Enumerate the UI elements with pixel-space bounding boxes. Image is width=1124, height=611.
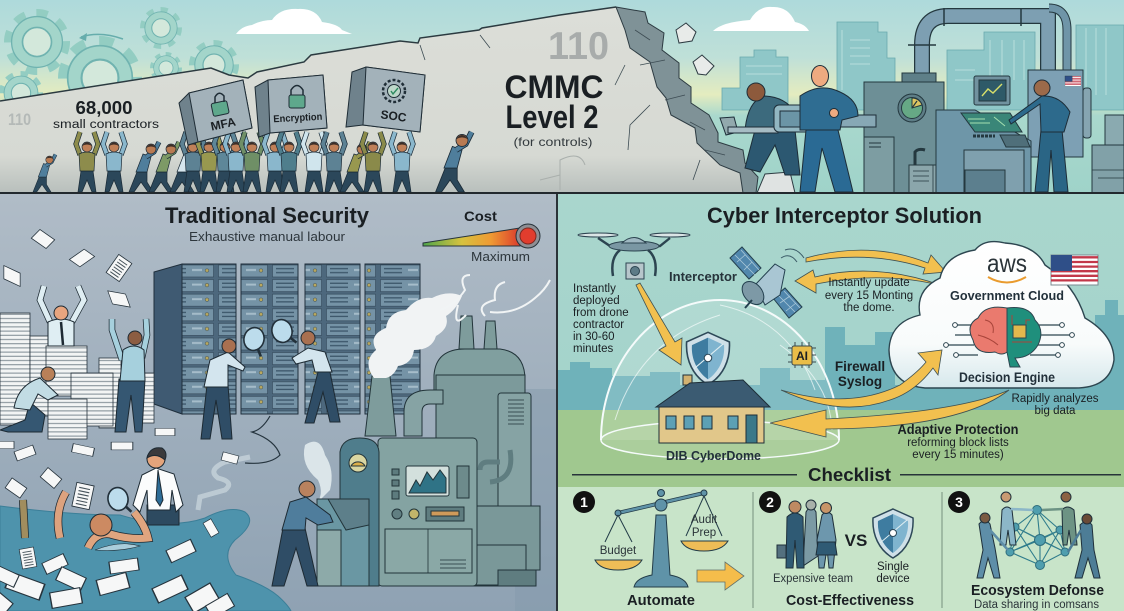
green ground [558, 410, 1124, 487]
label: 68,000 small contractors: 68,000 [76, 98, 132, 118]
icon: falling debris [676, 23, 795, 193]
label: faded 110 on wall left: 110 [8, 110, 31, 129]
heading: CMMC Level 2: Level 2 [506, 99, 598, 135]
item 3: Ecosystem Defense [948, 491, 1104, 611]
factory: tank with chimneys [365, 316, 540, 586]
block: MFA: MFA [209, 115, 237, 134]
gauge: cost meter at maximum [423, 208, 540, 264]
heading: Traditional Security: Exhaustive manual labour [189, 229, 346, 244]
person: kneeling sorting papers [0, 367, 58, 432]
item 2: Cost-Effectiveness: Expensive team [773, 573, 853, 585]
floating paper [0, 482, 235, 611]
dome shield bubble [601, 300, 839, 459]
person: back view arms raised [112, 319, 147, 432]
arrow: dome to decision engine [781, 350, 942, 407]
machine: right cabinet with flag [1028, 70, 1124, 193]
worker: left holding the ram [745, 83, 800, 175]
machine: console and screen [936, 76, 1031, 193]
label: Firewall Syslog [835, 359, 885, 389]
block: Encryption: Encryption [273, 112, 323, 125]
icon: people around network [977, 492, 1100, 578]
server racks [154, 264, 420, 414]
machine: control cabinet [317, 438, 477, 586]
arrow: satellite to cloud [806, 250, 946, 274]
item 2: Cost-Effectiveness: VS [845, 531, 867, 550]
label: Decision Engine: Decision Engine [959, 370, 1055, 385]
vertical divider [556, 194, 558, 611]
panel: Traditional Security [0, 194, 556, 611]
block: SOC [346, 67, 425, 132]
icon: ram drill [720, 105, 876, 135]
item 1: Automate: Prep [692, 527, 716, 539]
city skyline [722, 22, 1124, 110]
text: instantly update note: the dome. [843, 302, 895, 314]
water pool [0, 506, 291, 611]
text: rapidly analyzes [1012, 393, 1099, 417]
icon: magnifier in water [106, 486, 131, 516]
icon: AI chip: AI [796, 349, 808, 363]
arrow: decision engine to house [770, 390, 1009, 437]
flag [1051, 255, 1098, 285]
panel: top banner wall scene [0, 0, 1124, 193]
worker: operator at console [1009, 80, 1070, 192]
item 3: Ecosystem Defense: Data sharing in comsans [974, 599, 1099, 611]
text: instantly update note [825, 277, 913, 314]
scattered paper [0, 230, 239, 498]
text: drone deployment note: contractor [573, 319, 624, 331]
gauge: cost meter at maximum: Cost [464, 208, 497, 224]
text: drone deployment note: Instantly [573, 283, 616, 295]
panel: checklist items [558, 487, 1124, 611]
text: adaptive protection: reforming block lists [907, 437, 1009, 449]
heading: Traditional Security: Traditional Security [165, 203, 370, 228]
text: drone deployment note [573, 283, 629, 355]
text: instantly update note: every 15 Monting [825, 290, 913, 302]
text: adaptive protection: every 15 minutes) [912, 449, 1004, 461]
item 1: Automate: Budget [600, 545, 637, 557]
person: arms raised behind stacks [40, 286, 84, 346]
icon: cloud left [236, 9, 352, 34]
smoke plumes [304, 275, 550, 505]
block: Encryption [255, 75, 327, 137]
people pushing and lifting the blocks [33, 132, 472, 192]
block: SOC: SOC [380, 107, 408, 125]
government cloud [889, 242, 1114, 388]
text: rapidly analyzes: Rapidly analyzes [1012, 393, 1099, 405]
icon: expensive team [777, 500, 837, 568]
label: Firewall Syslog: Firewall [835, 359, 885, 374]
item 3: Ecosystem Defense: Ecosystem Defonse [971, 582, 1104, 599]
city skyline background [558, 300, 1124, 410]
icon: AI chip [788, 342, 816, 368]
label: 68,000 small contractors [53, 98, 159, 131]
text: instantly update note: Instantly update [828, 277, 910, 289]
icon: cloud right [713, 7, 809, 31]
item 3: Ecosystem Defense: 3 [955, 494, 963, 510]
pipework [908, 8, 1067, 76]
icon: satellite [730, 247, 804, 318]
person: drowning with raised arms [23, 492, 148, 550]
label: 68,000 small contractors: small contractors [53, 119, 159, 131]
icon: shield over house [686, 332, 730, 385]
heading: CMMC Level 2: (for controls) [514, 135, 592, 149]
text: adaptive protection [898, 422, 1018, 461]
item 1: Automate [573, 490, 744, 609]
item 2: Cost-Effectiveness: Single [877, 561, 909, 573]
text: adaptive protection: Adaptive Protection [898, 422, 1018, 437]
heading: Traditional Security [165, 203, 370, 244]
text: rapidly analyzes: big data [1035, 405, 1076, 417]
text: drone deployment note: minutes [573, 343, 614, 355]
icon: drone [578, 233, 690, 279]
icon: DIB house [656, 375, 770, 443]
heading: Checklist: Checklist [808, 465, 891, 485]
item 1: Automate: Audit [691, 514, 718, 526]
item 2: Cost-Effectiveness: Cost-Effectiveness [786, 592, 914, 609]
person: man standing in water [133, 448, 183, 525]
cable and mist [198, 416, 280, 510]
horizontal divider [0, 192, 1124, 194]
logo: aws: aws [987, 250, 1027, 278]
icon: single device shield [873, 509, 913, 558]
crumbling crack edge [616, 7, 758, 193]
item 2: Cost-Effectiveness: device [876, 573, 910, 585]
label: Interceptor: Interceptor [669, 270, 737, 284]
people: inspecting servers with magnifiers [201, 317, 340, 439]
heading: CMMC Level 2: CMMC [504, 69, 604, 105]
icon: balance scale [595, 490, 728, 587]
icon: yellow arrow [697, 562, 744, 590]
item 1: Automate: Automate [627, 592, 695, 609]
wall [0, 7, 743, 193]
paper stacks [0, 313, 154, 439]
block: MFA [179, 80, 252, 145]
text: drone deployment note: from drone [573, 307, 629, 319]
gauge: cost meter at maximum: Maximum [471, 249, 530, 264]
heading: CMMC Level 2 [504, 69, 604, 149]
label: DIB CyberDome: DIB CyberDome [666, 449, 761, 463]
icon: brain decision engine [944, 307, 1074, 367]
text: drone deployment note: deployed [573, 295, 620, 307]
machine: central unit with gauge [864, 73, 955, 193]
label: Firewall Syslog: Syslog [838, 374, 882, 389]
label: large 110 on wall: 110 [548, 25, 609, 68]
panel: Cyber Interceptor Solution [558, 194, 1124, 487]
arrow: drone to house [636, 283, 682, 365]
item 2: Cost-Effectiveness [759, 491, 914, 609]
item 1: Automate: 1 [580, 494, 588, 510]
person: operator at control panel [272, 481, 333, 586]
worker: centre with bald head [800, 66, 858, 192]
label: Government Cloud: Government Cloud [950, 288, 1064, 303]
heading: Cyber Interceptor Solution: Cyber Interceptor Solution [707, 203, 982, 228]
arrow: cloud to satellite [795, 270, 940, 293]
icon: background gears [2, 10, 236, 115]
text: drone deployment note: in 30-60 [573, 331, 615, 343]
item 2: Cost-Effectiveness: 2 [766, 494, 774, 510]
